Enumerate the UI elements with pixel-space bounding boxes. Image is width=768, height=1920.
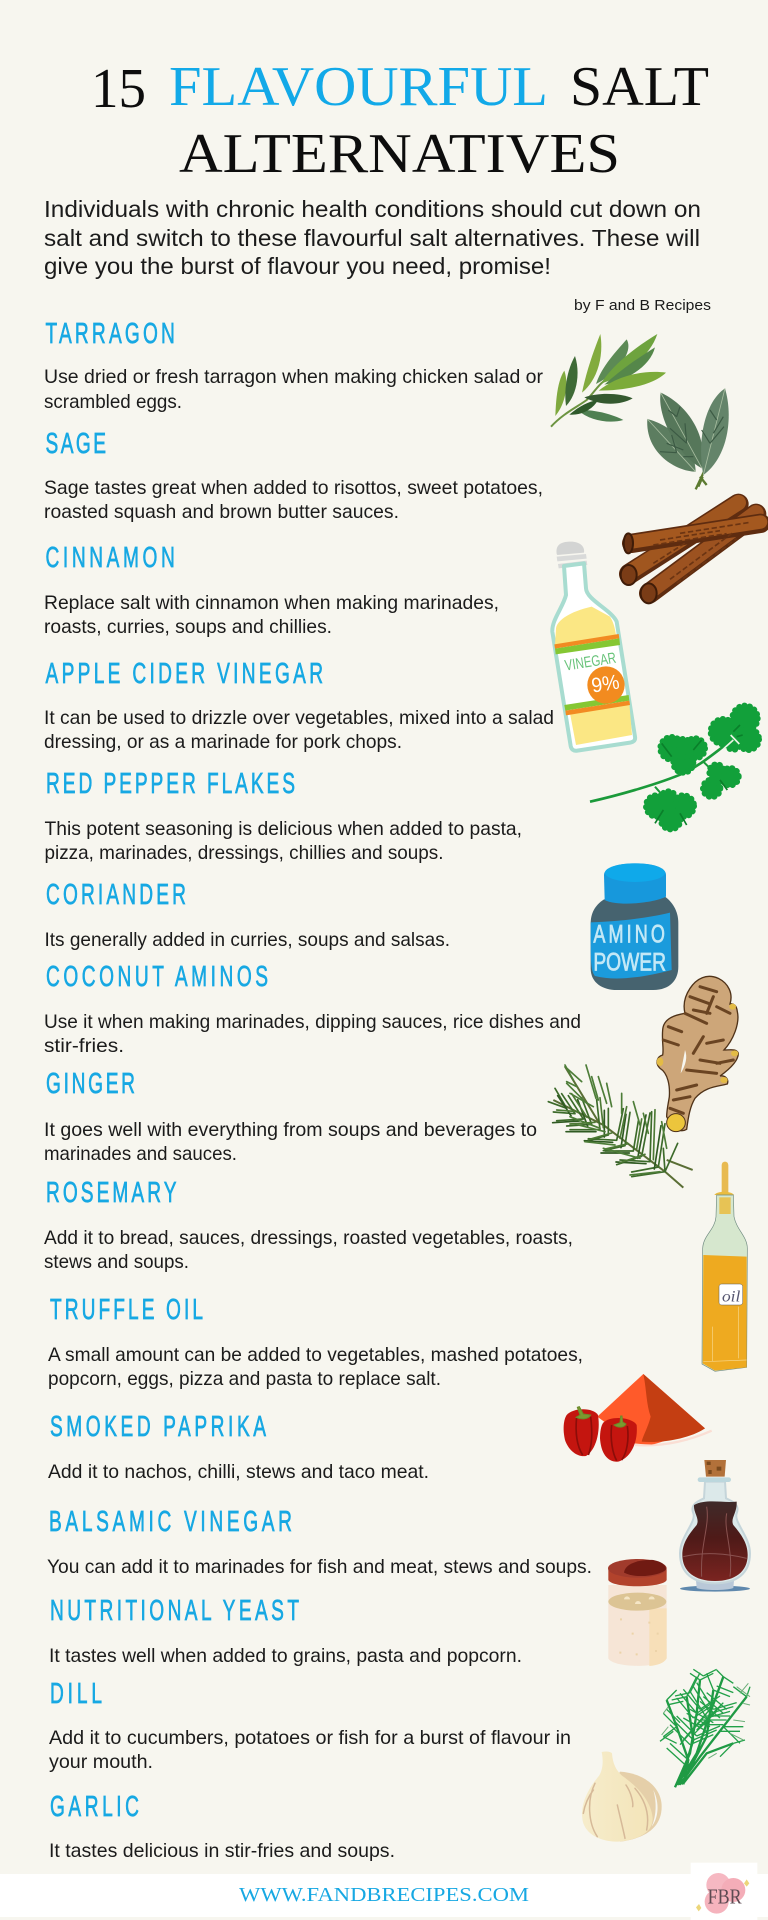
bottle glass (552, 563, 635, 751)
description: truffle oil: popcorn, eggs, pizza and pasta to replace salt. (48, 1368, 441, 1390)
heading: tarragon: TARRAGON (46, 318, 175, 350)
description: smoked paprika: Add it to nachos, chilli, stews and taco meat. (48, 1461, 429, 1483)
jar body (591, 897, 678, 990)
description: balsamic vinegar: You can add it to marinades for fish and meat, stews and soups. (47, 1556, 592, 1578)
label text: POWER (593, 948, 666, 976)
glass bottle (680, 1482, 750, 1583)
description: cinnamon: Replace salt with cinnamon when making marinades, (44, 592, 499, 614)
title: SALT (570, 56, 709, 118)
description: rosemary (44, 1227, 573, 1273)
label text: AMINO (593, 920, 665, 948)
icon: tarragon sprig (551, 334, 666, 427)
description: ginger: marinades and sauces. (44, 1143, 237, 1165)
entry: rosemary (44, 1177, 573, 1273)
description: apple cider vinegar: It can be used to drizzle over vegetables, mixed into a salad (44, 707, 554, 729)
description: sage: Sage tastes great when added to risottos, sweet potatoes, (44, 477, 543, 499)
vinegar liquid (682, 1501, 748, 1581)
icon: garlic bulb (582, 1752, 662, 1842)
heading: apple cider vinegar: APPLE CIDER VINEGAR (46, 658, 323, 690)
description: dill (49, 1727, 571, 1773)
description: ginger (44, 1119, 537, 1165)
icon: dill sprig (660, 1669, 750, 1787)
entry: tarragon (44, 318, 544, 413)
pourer spout (715, 1165, 735, 1192)
cork (704, 1460, 726, 1477)
jar label (591, 913, 672, 978)
label bands (554, 634, 619, 649)
logo: FBR (691, 1863, 757, 1920)
entry: garlic (49, 1791, 395, 1862)
icon: sage leaves (647, 388, 729, 489)
heading: sage: SAGE (46, 428, 106, 460)
description: coconut aminos: stir-fries. (44, 1035, 124, 1057)
description: apple cider vinegar: dressing, or as a marinade for pork chops. (44, 731, 402, 753)
entry: coconut aminos (44, 961, 581, 1057)
description: sage (44, 477, 543, 523)
description: red pepper flakes: pizza, marinades, dressings, chillies and soups. (44, 842, 444, 864)
bottle lip (698, 1477, 731, 1482)
description: sage: roasted squash and brown butter sauces. (44, 501, 399, 523)
description: nutritional yeast: It tastes well when added to grains, pasta and popcorn. (49, 1645, 522, 1667)
heading: smoked paprika: SMOKED PAPRIKA (50, 1411, 267, 1443)
label text: VINEGAR (564, 650, 617, 675)
entry: sage (44, 428, 543, 523)
description: red pepper flakes: This potent seasoning is delicious when added to pasta, (44, 818, 522, 840)
footer url: WWW.FANDBRECIPES.COM (239, 1884, 529, 1906)
icon: smoked paprika pile and peppers (564, 1374, 712, 1462)
heading: nutritional yeast: NUTRITIONAL YEAST (50, 1595, 299, 1627)
entry: truffle oil (48, 1294, 583, 1390)
description: truffle oil: A small amount can be added to vegetables, mashed potatoes, (48, 1344, 583, 1366)
entry: coriander (44, 879, 450, 951)
heading: ginger: GINGER (46, 1068, 135, 1100)
description: rosemary: Add it to bread, sauces, dressings, roasted vegetables, roasts, (44, 1227, 573, 1249)
heading: rosemary: ROSEMARY (46, 1177, 176, 1209)
heading: dill: DILL (50, 1678, 102, 1710)
heading: balsamic vinegar: BALSAMIC VINEGAR (49, 1506, 292, 1538)
oil (703, 1255, 747, 1371)
description: dill: Add it to cucumbers, potatoes or fish for a burst of flavour in (49, 1727, 571, 1749)
description: dill: your mouth. (49, 1751, 153, 1773)
heading: garlic: GARLIC (50, 1791, 139, 1823)
icon: balsamic vinegar bottle (680, 1460, 750, 1592)
glass bottle (702, 1195, 747, 1371)
intro text: Individuals with chronic health conditions should cut down on (44, 196, 701, 222)
entry: smoked paprika (48, 1411, 429, 1483)
bottle base (680, 1586, 750, 1592)
oil label (719, 1284, 743, 1306)
description: red pepper flakes (44, 818, 522, 864)
entry: nutritional yeast (49, 1595, 522, 1667)
icon: vinegar bottle (552, 542, 635, 751)
description: cinnamon: roasts, curries, soups and chillies. (44, 616, 332, 638)
heading: red pepper flakes: RED PEPPER FLAKES (46, 768, 295, 800)
jar lid (608, 1569, 667, 1586)
label text (593, 920, 666, 976)
icon: ginger root (657, 976, 738, 1132)
title: FLAVOURFUL (169, 56, 548, 118)
description: coconut aminos (44, 1011, 581, 1057)
entry: apple cider vinegar (44, 658, 554, 753)
heading: coriander: CORIANDER (46, 879, 186, 911)
vinegar liquid (555, 607, 632, 745)
description: truffle oil (48, 1344, 583, 1390)
bottle cap (556, 542, 584, 555)
percentage badge: 9% (590, 671, 621, 698)
footer band (0, 1874, 768, 1917)
icon: nutritional yeast jar (608, 1559, 667, 1666)
title (91, 56, 709, 185)
intro text: give you the burst of flavour you need, promise! (44, 253, 551, 279)
icon: oil bottle (702, 1165, 747, 1371)
description: apple cider vinegar (44, 707, 554, 753)
entry: cinnamon (44, 542, 499, 638)
jar body (608, 1585, 667, 1666)
title: 15 (91, 58, 146, 120)
icon: coriander (590, 706, 759, 829)
intro text: salt and switch to these flavourful salt alternatives. These will (44, 225, 700, 251)
icon: cinnamon sticks (621, 503, 761, 603)
heading: coconut aminos: COCONUT AMINOS (46, 961, 268, 993)
description: cinnamon (44, 592, 499, 638)
entry: red pepper flakes (44, 768, 522, 864)
description: tarragon: scrambled eggs. (44, 391, 182, 413)
intro text (44, 196, 701, 279)
jar lid (604, 863, 666, 904)
description: coriander: Its generally added in curries, soups and salsas. (44, 929, 450, 951)
logo lettering: FBR (708, 1886, 742, 1908)
description: ginger: It goes well with everything from soups and beverages to (44, 1119, 537, 1141)
red peppers (564, 1407, 637, 1462)
entry: ginger (44, 1068, 537, 1165)
description: tarragon: Use dried or fresh tarragon when making chicken salad or (44, 366, 544, 388)
heading: cinnamon: CINNAMON (46, 542, 175, 574)
title: ALTERNATIVES (179, 123, 620, 185)
description: rosemary: stews and soups. (44, 1251, 189, 1273)
description: coconut aminos: Use it when making marinades, dipping sauces, rice dishes and (44, 1011, 581, 1033)
icon: rosemary sprig (548, 1065, 693, 1188)
oil label: oil (722, 1289, 740, 1306)
percentage badge (587, 666, 625, 704)
entry: dill (49, 1678, 571, 1773)
entry: balsamic vinegar (47, 1506, 592, 1578)
paprika pile (597, 1374, 705, 1445)
description: garlic: It tastes delicious in stir-fries and soups. (49, 1840, 395, 1862)
byline: by F and B Recipes (574, 297, 711, 314)
icon: amino power jar (591, 863, 678, 990)
heading: truffle oil: TRUFFLE OIL (50, 1294, 203, 1326)
description: tarragon (44, 366, 544, 413)
